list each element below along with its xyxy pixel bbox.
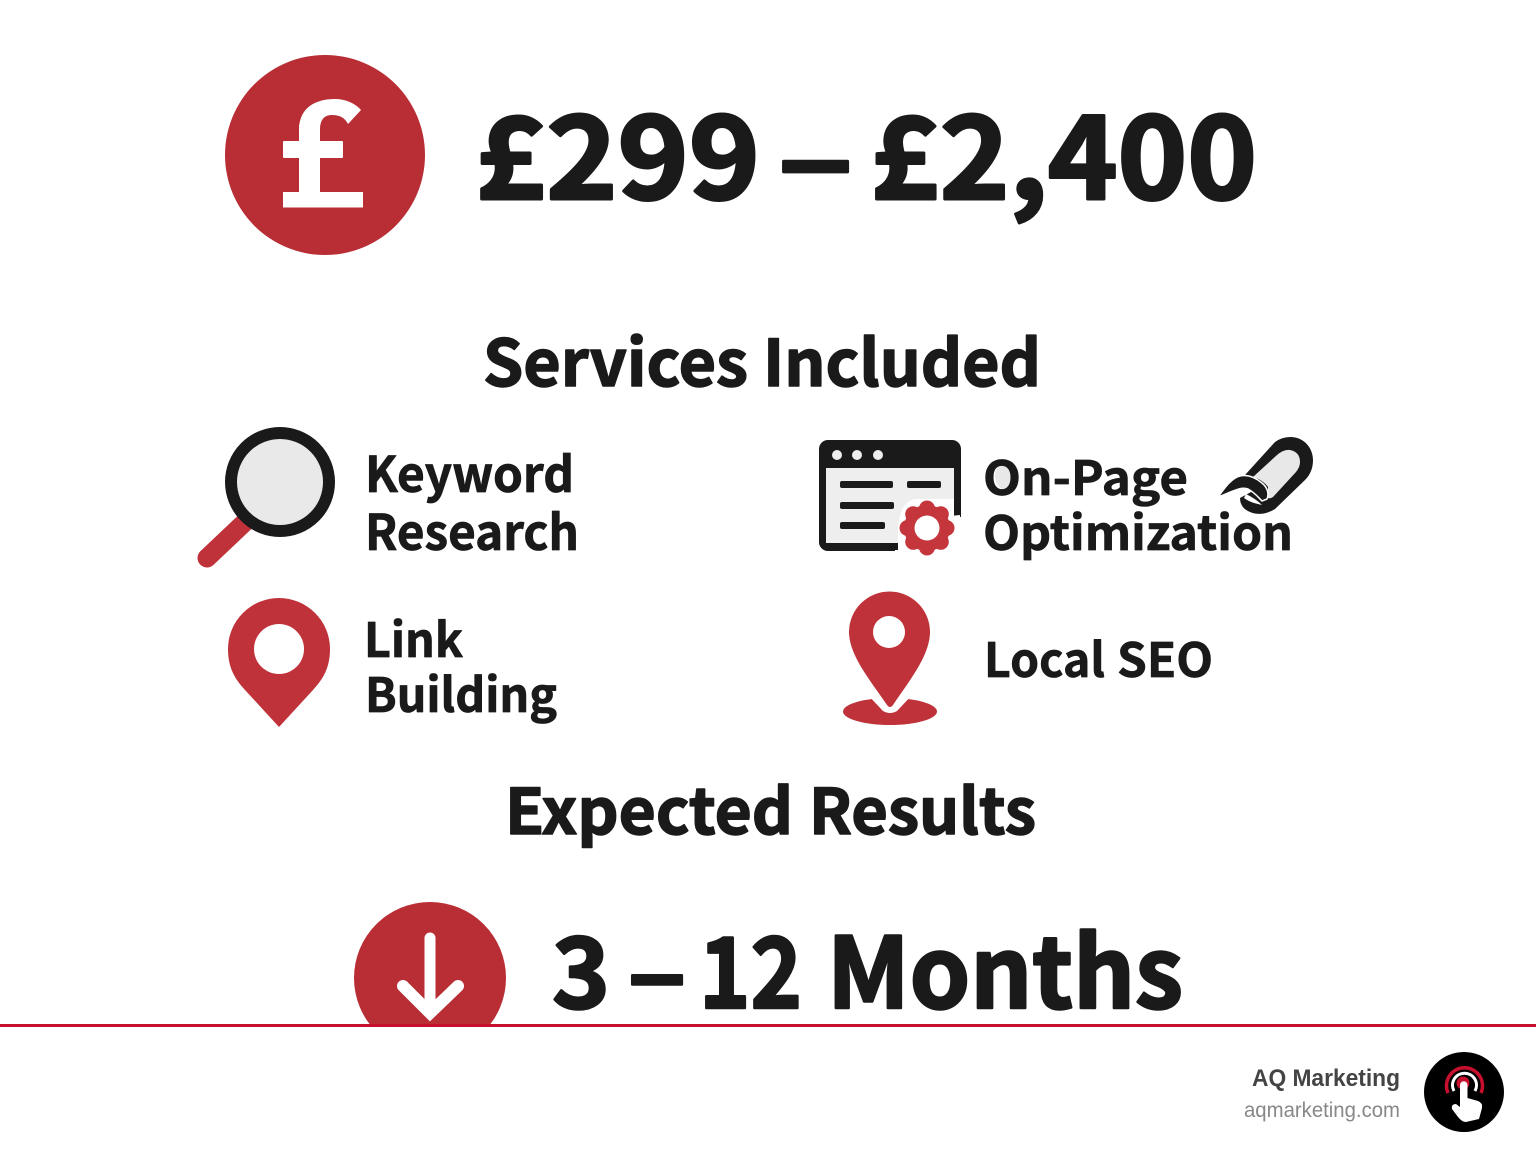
icon: location pin with base <box>843 592 937 725</box>
icon: magnifying glass <box>207 433 329 558</box>
label: on-page optimization <box>983 440 1293 564</box>
label: local seo: Local <box>984 622 1105 691</box>
label: keyword research: Keyword <box>365 436 574 507</box>
footer rule <box>0 1024 1536 1027</box>
heading: expected results: Results <box>809 762 1036 853</box>
label: on-page optimization: On-Page <box>983 440 1188 509</box>
heading: expected results: Expected <box>505 762 793 853</box>
label: link building: Building <box>365 657 557 726</box>
label: keyword research: Research <box>365 494 579 565</box>
service: link building <box>228 598 557 727</box>
service: local seo <box>843 592 1213 725</box>
price range: £299 <box>475 68 760 232</box>
heading: services included: Services <box>483 313 748 405</box>
timeframe: Months <box>827 895 1183 1037</box>
icon: map pin <box>228 598 330 727</box>
icon: brand logo <box>1424 1052 1504 1132</box>
price range: – <box>777 68 854 232</box>
icon: browser window with gear <box>819 440 962 560</box>
service: keyword research <box>207 433 579 565</box>
price section <box>225 55 1257 255</box>
icon: down arrow circle <box>340 902 530 1067</box>
service: on-page optimization <box>819 437 1313 564</box>
brand name: AQ Marketing <box>1252 1065 1400 1092</box>
price range: £2,400 <box>870 68 1257 232</box>
heading: services included: Included <box>763 313 1041 405</box>
timeframe: – <box>627 895 687 1037</box>
results timeline <box>340 895 1183 1067</box>
label: on-page optimization: Optimization <box>983 495 1293 564</box>
timeframe: 12 <box>699 895 802 1037</box>
footer brand <box>1244 1052 1504 1132</box>
label: local seo: SEO <box>1117 622 1213 691</box>
icon: chain link <box>1218 437 1313 514</box>
icon: pound circle <box>225 55 425 255</box>
timeframe: 3 <box>552 895 610 1037</box>
label: link building: Link <box>364 602 464 671</box>
brand url: aqmarketing.com <box>1244 1099 1400 1122</box>
